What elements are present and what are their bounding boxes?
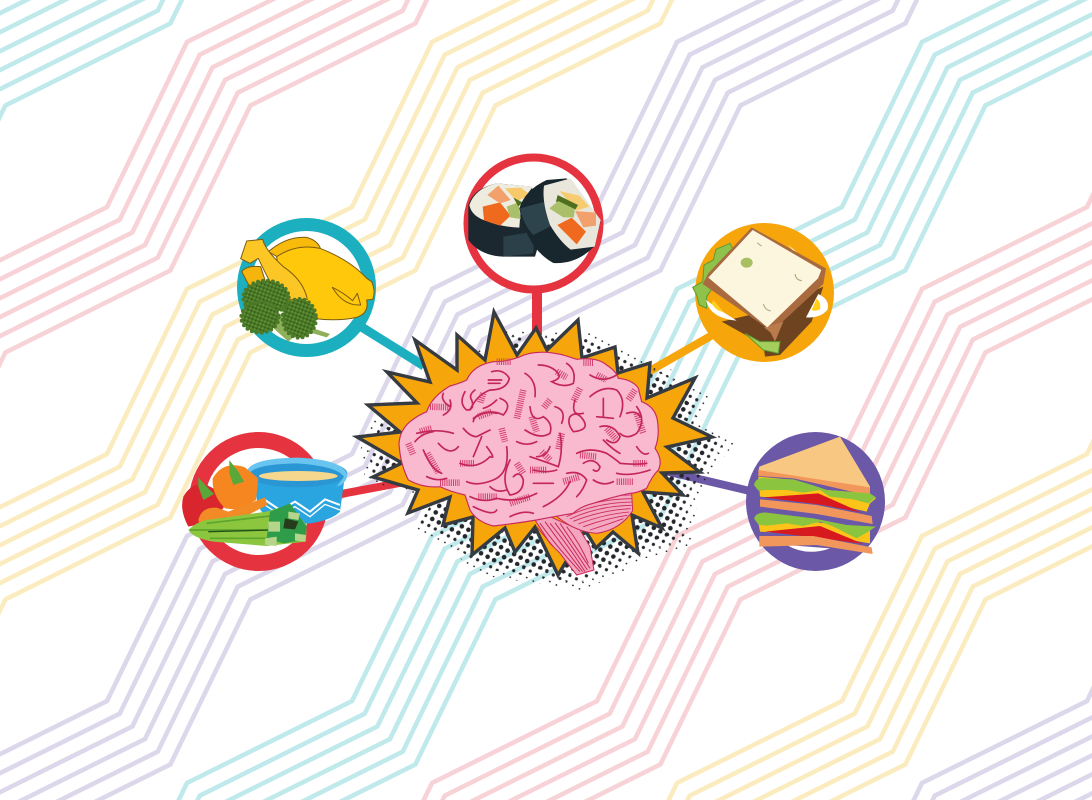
top bread with crust — [703, 227, 826, 333]
upper filling — [758, 477, 876, 512]
middle bread — [760, 499, 873, 524]
connector: club sandwich to brain — [665, 471, 750, 491]
bread dimples — [741, 258, 753, 268]
lower bread — [722, 287, 823, 357]
food circle: toast sandwich — [693, 223, 834, 362]
lettuce — [693, 243, 735, 308]
white background sliver — [787, 545, 830, 552]
celery — [188, 503, 307, 546]
lower filling — [758, 522, 870, 543]
shading hatches — [408, 362, 647, 503]
bottom bread — [759, 536, 873, 554]
top bread — [758, 437, 870, 490]
connector: sushi to brain — [532, 290, 542, 335]
food circle: club sandwich — [746, 432, 885, 571]
white background sliver — [788, 245, 812, 265]
food circle: chicken and broccoli — [241, 224, 374, 350]
broccoli — [241, 281, 330, 342]
chicken — [241, 237, 374, 320]
halftone dots behind burst — [360, 331, 734, 590]
cerebrum — [399, 352, 660, 526]
brain stem — [535, 517, 594, 575]
brain illustration — [399, 352, 660, 575]
egg — [706, 300, 737, 321]
peppers and carrots — [182, 460, 267, 527]
comic burst — [357, 312, 712, 575]
connector: sandwich to brain — [648, 333, 716, 372]
gyri folds — [415, 363, 650, 517]
connector: soup to brain — [325, 481, 410, 497]
left sushi roll — [468, 183, 543, 257]
food circle: soup and vegetables — [182, 440, 347, 563]
right sushi roll — [519, 178, 601, 263]
food circle: sushi rolls — [468, 158, 601, 290]
connector: chicken to brain — [360, 326, 424, 366]
bowl — [247, 458, 347, 525]
cerebellum — [553, 493, 633, 533]
